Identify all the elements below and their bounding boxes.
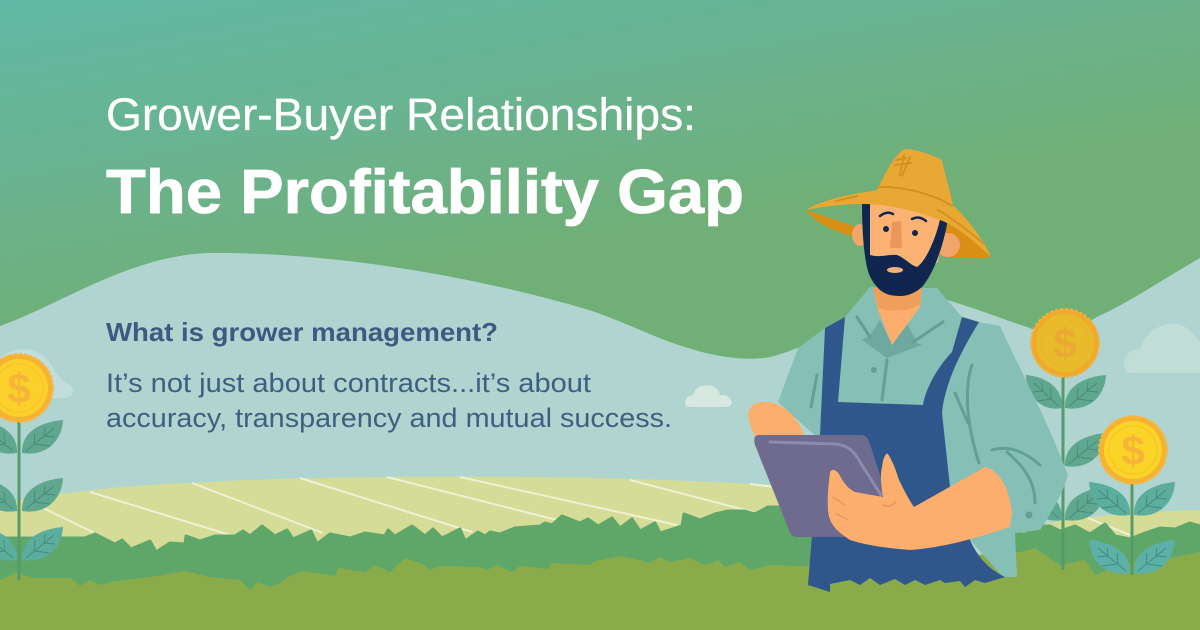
farmer: neck	[873, 288, 922, 345]
cloud: right	[1124, 324, 1200, 373]
farmer	[748, 149, 1068, 592]
hat: underside	[806, 200, 991, 258]
body text: It’s not just about contracts...it’s about	[106, 368, 592, 398]
farmer: ears	[852, 224, 960, 257]
farmer: mouth	[887, 267, 903, 273]
coin plant: left: $	[7, 365, 31, 412]
cloud: centre small	[685, 385, 732, 407]
coin plant: right front	[1089, 416, 1175, 575]
title: line one: Grower-Buyer Relationships:	[106, 89, 696, 140]
coin plant: behind man	[1025, 309, 1106, 570]
farmer: tablet	[754, 435, 887, 537]
subheading: What is grower management?	[106, 317, 498, 347]
farmer: shirt	[778, 287, 1068, 577]
farmer: eyes and brows	[880, 213, 926, 236]
title: line two: The Profitability Gap	[106, 158, 744, 227]
hat: stitching	[836, 155, 983, 243]
cloud: left behind coin	[0, 349, 73, 398]
farmer: left hand	[748, 402, 805, 437]
coin plant: left	[0, 354, 63, 580]
farmer: neck shadow	[873, 288, 922, 311]
field	[0, 477, 1200, 560]
stem base overlay: plant behind man	[1062, 530, 1064, 570]
coin plant: right front: $	[1121, 427, 1145, 474]
hat: crown and brim	[806, 149, 991, 257]
farmer: collar shadow	[862, 320, 922, 358]
farmer: nose	[890, 221, 902, 248]
body text: accuracy, transparency and mutual success.	[106, 403, 672, 433]
body text	[106, 368, 672, 433]
ground	[0, 548, 1200, 630]
farmer: beard	[862, 200, 948, 296]
bushes: mid green	[0, 507, 1200, 600]
farmer: right arm and hand	[828, 454, 1012, 550]
farmer: overalls	[808, 317, 1005, 592]
farmer: face	[866, 195, 948, 290]
coin plant: behind man: $	[1053, 320, 1077, 367]
rolling hills	[0, 253, 1200, 560]
farmer: shirt creases	[811, 317, 1040, 517]
